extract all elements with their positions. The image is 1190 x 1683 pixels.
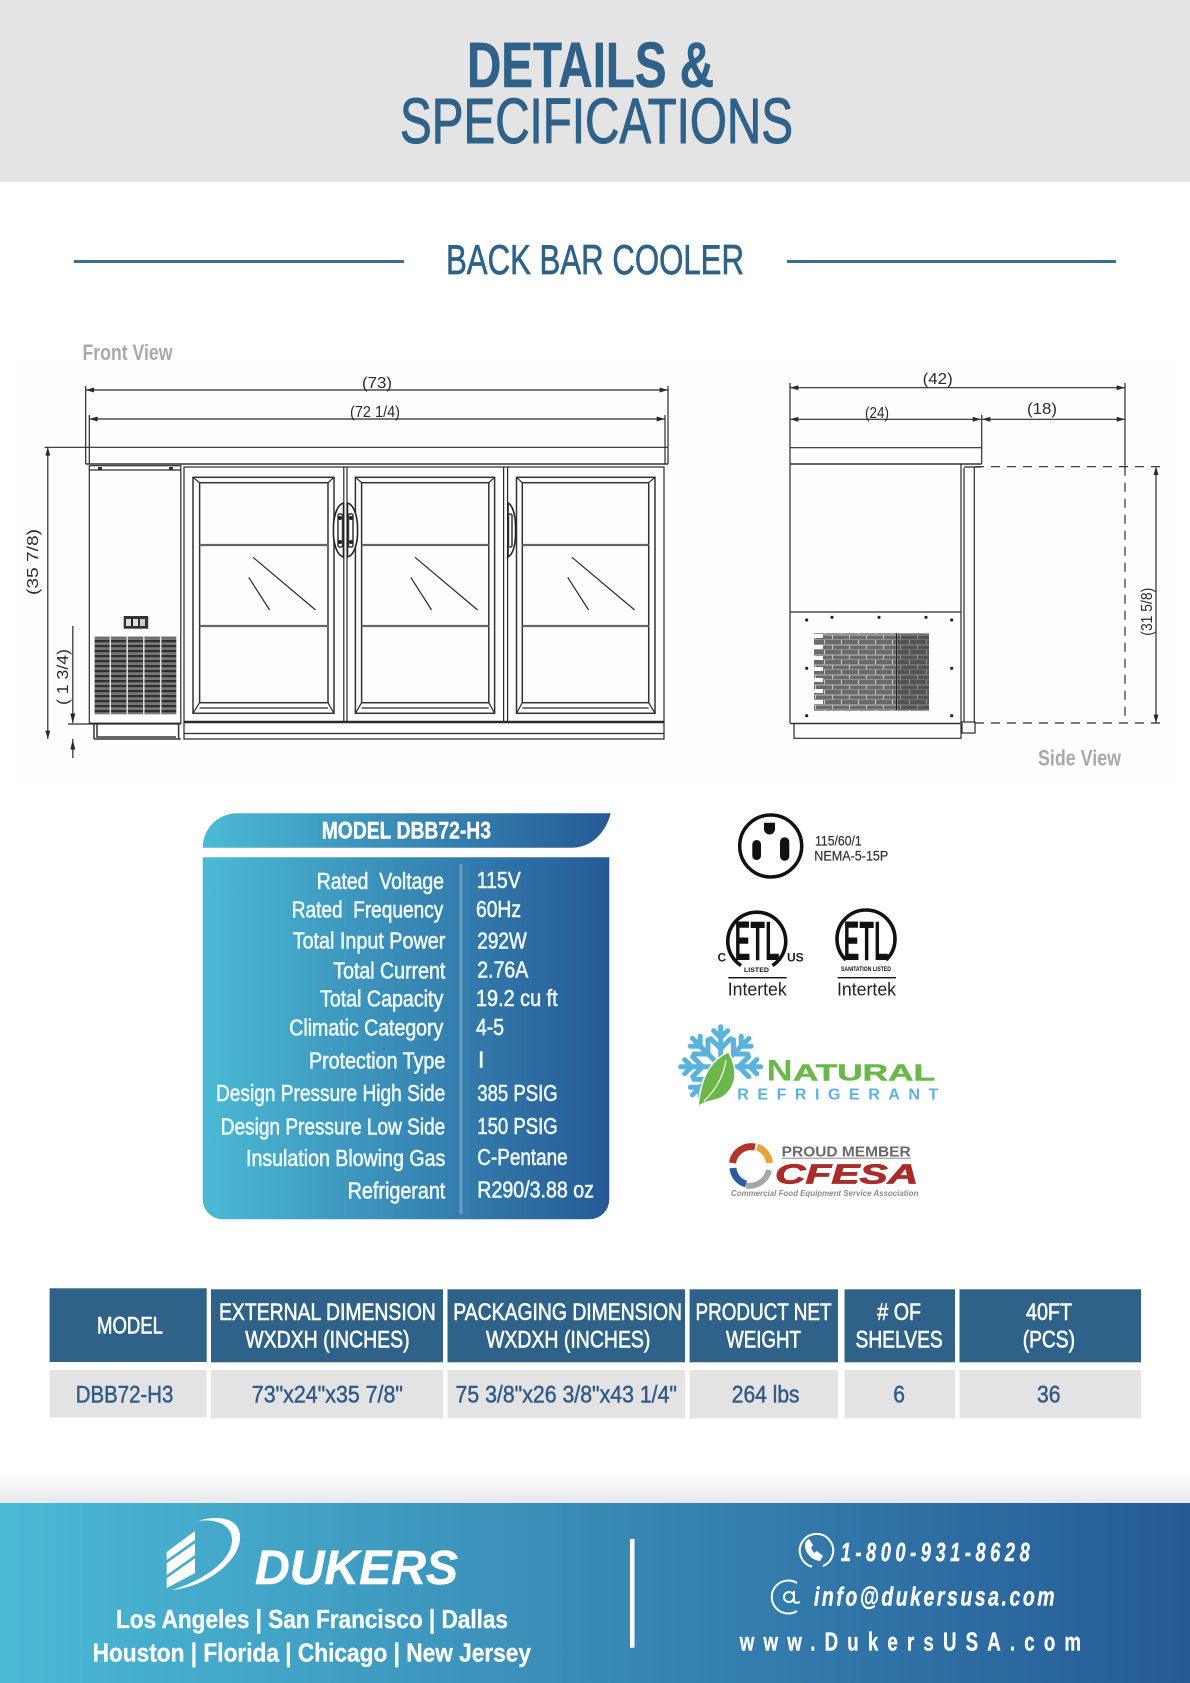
table header row: 40FT	[1026, 1299, 1072, 1326]
cities: Los Angeles | San Francisco | Dallas	[116, 1604, 508, 1634]
icon: ETL listed Intertek: Intertek	[728, 980, 788, 1000]
phone contact: 1-800-931-8628	[841, 1538, 1030, 1567]
icon: CFESA proud member logo	[731, 1145, 918, 1198]
table data row	[50, 1370, 1141, 1418]
icon: ETL listed Intertek: LISTED	[744, 967, 769, 974]
spec labels: Insulation Blowing Gas	[246, 1145, 445, 1171]
spec values: 385 PSIG	[477, 1080, 558, 1106]
spec values: 150 PSIG	[477, 1113, 558, 1139]
cities: Houston | Florida | Chicago | New Jersey	[93, 1638, 531, 1668]
dimension: 1 3/4: ( 1 3/4)	[55, 649, 72, 705]
dimension: height 35 7/8: (35 7/8)	[25, 529, 42, 595]
table header row: (PCS)	[1023, 1326, 1075, 1353]
snowflake	[681, 1027, 761, 1102]
spec labels: Total Capacity	[320, 986, 444, 1012]
title: DETAILS &	[467, 29, 714, 101]
icon: ETL sanitation listed Intertek: Intertek	[837, 980, 897, 1000]
refrigerator cabinet	[184, 467, 664, 739]
spec labels: Total Input Power	[293, 927, 446, 953]
table data row: 36	[1037, 1382, 1060, 1409]
section heading: back bar cooler	[74, 236, 1116, 283]
icon: natural refrigerant logo: N	[767, 1055, 793, 1088]
icon: natural refrigerant logo: ATURAL	[793, 1060, 935, 1086]
icon: CFESA proud member logo: CFESA	[775, 1158, 918, 1189]
table data row: DBB72-H3	[76, 1382, 173, 1409]
spec values: 292W	[477, 927, 527, 953]
header band	[0, 0, 1190, 182]
drawing backdrop	[13, 355, 1178, 787]
dimension: clearance 18: (18)	[1027, 401, 1057, 418]
panel screws	[805, 616, 953, 717]
front view drawing	[25, 375, 668, 758]
icon: CFESA proud member logo: PROUD MEMBER	[782, 1145, 911, 1161]
cities	[93, 1604, 531, 1668]
icon: ETL listed Intertek	[718, 909, 804, 1000]
spec values: 2.76A	[477, 957, 529, 983]
spec values: I	[478, 1047, 484, 1073]
footer shadow	[0, 1472, 1190, 1503]
table: model dimensions	[50, 1288, 1141, 1418]
icon: NEMA plug: NEMA-5-15P	[814, 849, 888, 864]
icon: NEMA plug	[740, 815, 888, 877]
dimension: overall depth 42: (42)	[923, 371, 953, 388]
table data row: 264 lbs	[732, 1382, 800, 1409]
spec labels: Protection Type	[309, 1048, 445, 1074]
countertop	[45, 447, 668, 464]
spec labels: Total Current	[333, 957, 446, 983]
spec labels: Design Pressure High Side	[216, 1080, 445, 1106]
table data row: 75 3/8"x26 3/8"x43 1/4"	[456, 1382, 677, 1409]
spec values: 115V	[477, 867, 521, 893]
table header row	[50, 1288, 1141, 1362]
website: www.DukersUSA.com	[739, 1627, 1081, 1656]
spec labels: Design Pressure Low Side	[221, 1113, 445, 1139]
dimension: overall width 73	[86, 375, 668, 464]
front view label: Front View	[82, 340, 173, 365]
title: SPECIFICATIONS	[400, 85, 793, 157]
spec labels: Climatic Category	[289, 1015, 444, 1041]
dimension: 1 3/4	[55, 626, 89, 758]
door swing clearance	[975, 383, 1160, 723]
door handles	[333, 503, 516, 557]
table header row: WXDXH (INCHES)	[486, 1326, 650, 1353]
icon: ETL sanitation listed Intertek: SANITATION LISTED	[841, 967, 892, 973]
table header row: PRODUCT NET	[696, 1299, 832, 1326]
logo wordmark: DUKERS	[255, 1542, 458, 1595]
front vent grille	[95, 637, 176, 714]
door 3	[516, 477, 655, 713]
icon: CFESA proud member logo: Commercial Food Equipment Service Association	[731, 1188, 918, 1198]
section heading: back bar cooler: BACK BAR COOLER	[446, 236, 744, 283]
icon: ETL listed Intertek: ETL	[734, 909, 780, 972]
spec labels: Rated Voltage	[317, 868, 444, 894]
door 2	[355, 477, 495, 713]
table header row: EXTERNAL DIMENSION	[219, 1299, 436, 1326]
model heading tab	[203, 813, 611, 848]
table header row: WEIGHT	[726, 1326, 801, 1353]
side cabinet body	[790, 383, 982, 738]
table header row: MODEL	[97, 1312, 163, 1339]
footer	[0, 1503, 1190, 1683]
table data row: 6	[893, 1382, 905, 1409]
side vent grille	[814, 633, 929, 711]
logo mark	[167, 1518, 240, 1590]
table header row: # OF	[877, 1299, 921, 1326]
spec panel background	[203, 857, 609, 1219]
compressor housing	[89, 466, 181, 723]
panel: model specifications	[203, 813, 611, 1219]
side view label: Side View	[1038, 746, 1122, 771]
dimension: width 72 1/4: (72 1/4)	[350, 404, 400, 421]
footer background	[0, 1503, 1190, 1683]
table header row: PACKAGING DIMENSION	[453, 1299, 682, 1326]
icon: natural refrigerant logo: REFRIGERANT	[737, 1086, 939, 1103]
dimension: depth 24: (24)	[865, 405, 889, 422]
dimension: height 31 5/8: (31 5/8)	[1139, 588, 1156, 636]
dimension: width 72 1/4	[89, 404, 665, 464]
control box	[124, 616, 148, 629]
icon: NEMA plug: 115/60/1	[815, 834, 862, 849]
icon: ETL sanitation listed Intertek: ETL	[844, 909, 888, 972]
spec values	[476, 867, 594, 1202]
icon: natural refrigerant logo	[681, 1027, 939, 1107]
title	[400, 29, 793, 157]
icon: ETL listed Intertek: C	[718, 951, 726, 965]
spec values: R290/3.88 oz	[477, 1176, 594, 1202]
spec values: 19.2 cu ft	[476, 985, 558, 1011]
spec values: 60Hz	[476, 896, 521, 922]
table header row: SHELVES	[856, 1326, 943, 1353]
column divider	[460, 864, 462, 1214]
leaf	[698, 1052, 735, 1107]
icon: ETL listed Intertek: US	[787, 951, 804, 965]
footer divider	[630, 1539, 634, 1648]
model heading tab: MODEL DBB72-H3	[322, 817, 491, 844]
side view drawing	[790, 371, 1160, 738]
email contact: info@dukersusa.com	[814, 1582, 1055, 1611]
table header row: WXDXH (INCHES)	[245, 1326, 410, 1353]
dimension: overall width 73: (73)	[362, 375, 392, 392]
icon: ETL sanitation listed Intertek	[837, 909, 897, 1000]
spec labels	[216, 868, 446, 1203]
table data row: 73"x24"x35 7/8"	[252, 1382, 403, 1409]
spec labels: Rated Frequency	[292, 897, 444, 923]
spec labels: Refrigerant	[348, 1177, 446, 1203]
spec values: C-Pentane	[477, 1144, 568, 1170]
door 1	[193, 477, 334, 713]
spec values: 4-5	[476, 1014, 504, 1040]
compressor base feet	[89, 724, 181, 739]
